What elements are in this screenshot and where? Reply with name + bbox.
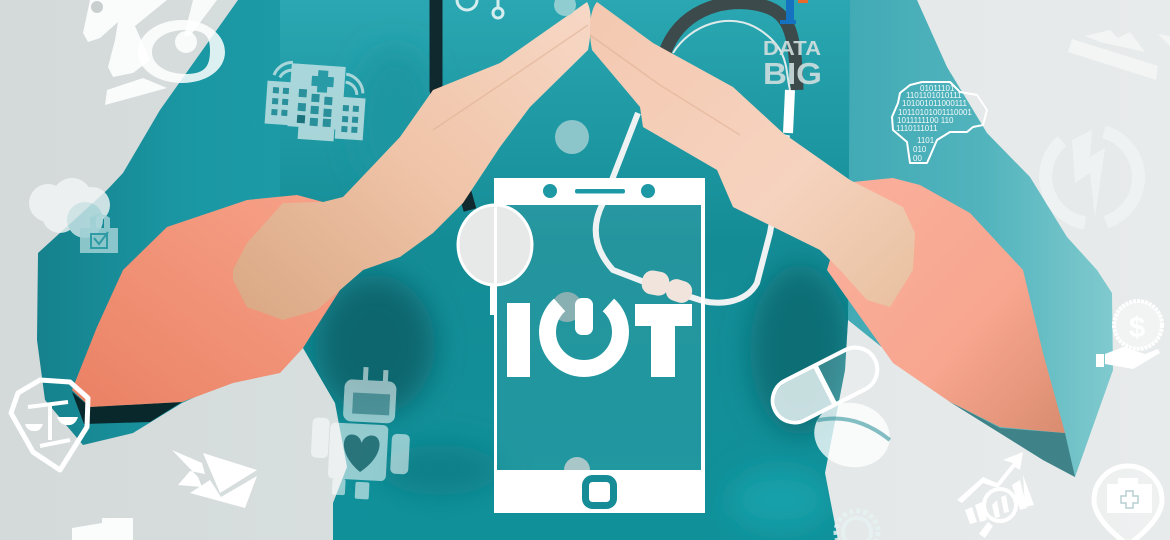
icon: big data label: BIG bbox=[763, 56, 822, 91]
right forearm and hand bbox=[590, 2, 915, 307]
icon: gear bottom centre bbox=[836, 511, 878, 540]
icon: blue and orange logo fragment bbox=[780, 0, 808, 24]
icon: hand with dollar coin: $ bbox=[1129, 312, 1145, 344]
icon: brain with binary digits: 00 bbox=[913, 154, 922, 163]
stethoscope connector bbox=[640, 269, 695, 305]
icon: medical kit location pin bbox=[1094, 466, 1162, 540]
icon: brain with binary digits bbox=[892, 82, 987, 163]
finger creases bbox=[433, 25, 740, 135]
phone frame bbox=[494, 178, 705, 513]
icon: hand with dollar coin bbox=[1096, 301, 1162, 369]
icon: brain with binary digits: 1011111100 110 bbox=[897, 116, 954, 125]
phone screen tint bbox=[497, 205, 701, 470]
right sleeve lower shadow bbox=[950, 402, 1075, 477]
icon: brain with binary digits: 1101101010111 bbox=[906, 91, 962, 100]
icon: hospital with wifi bbox=[264, 61, 368, 143]
icon: big data label: DATA bbox=[763, 38, 821, 60]
icon: brain with binary digits: 1110111011 bbox=[896, 124, 938, 133]
right sleeve bbox=[830, 0, 1113, 477]
icon: brain with binary digits: 010 bbox=[913, 145, 927, 154]
icon: knight with target bbox=[83, 0, 225, 105]
icon: connected nodes at top bbox=[457, 0, 503, 18]
icon: flying envelope bbox=[172, 450, 257, 508]
phone sensor bbox=[641, 184, 655, 198]
left sleeve bbox=[37, 0, 400, 445]
shirt buttons bbox=[552, 0, 590, 483]
icon: tablet pill bbox=[808, 396, 896, 474]
left cuff bbox=[72, 195, 363, 407]
torso bbox=[280, 0, 850, 540]
icon: device top right bbox=[1068, 30, 1170, 80]
icon: brain with binary digits: 01011101 bbox=[920, 84, 955, 93]
icon: brain with binary digits: 1101 bbox=[917, 136, 935, 145]
icon: brain with binary digits: 101001011000111 bbox=[902, 99, 968, 108]
icon: big data label bbox=[763, 38, 822, 91]
stethoscope chest piece bbox=[458, 205, 532, 315]
smartphone icon bbox=[458, 178, 705, 513]
icon: growth chart with magnifier bbox=[957, 452, 1034, 538]
left sleeve shadow under cuff bbox=[72, 392, 182, 424]
icon: corner box bottom left bbox=[72, 518, 133, 540]
torso fold shading bbox=[315, 50, 850, 530]
IOT wordmark bbox=[507, 298, 692, 377]
icon: cloud with padlock bbox=[29, 178, 118, 253]
phone speaker bbox=[575, 189, 625, 194]
icon: scales of justice shield bbox=[11, 380, 88, 470]
left forearm and hand bbox=[233, 2, 591, 320]
icon: capsule pill bbox=[765, 340, 885, 430]
icon: robot with heart bbox=[309, 364, 413, 501]
icon: brain with binary digits: 10110101001110001 bbox=[898, 108, 972, 117]
right cuff bbox=[827, 178, 1065, 433]
phone camera bbox=[543, 184, 557, 198]
stethoscope tubes bbox=[436, 0, 797, 303]
icon: power lightning bbox=[1046, 130, 1138, 223]
phone home button bbox=[586, 478, 614, 506]
